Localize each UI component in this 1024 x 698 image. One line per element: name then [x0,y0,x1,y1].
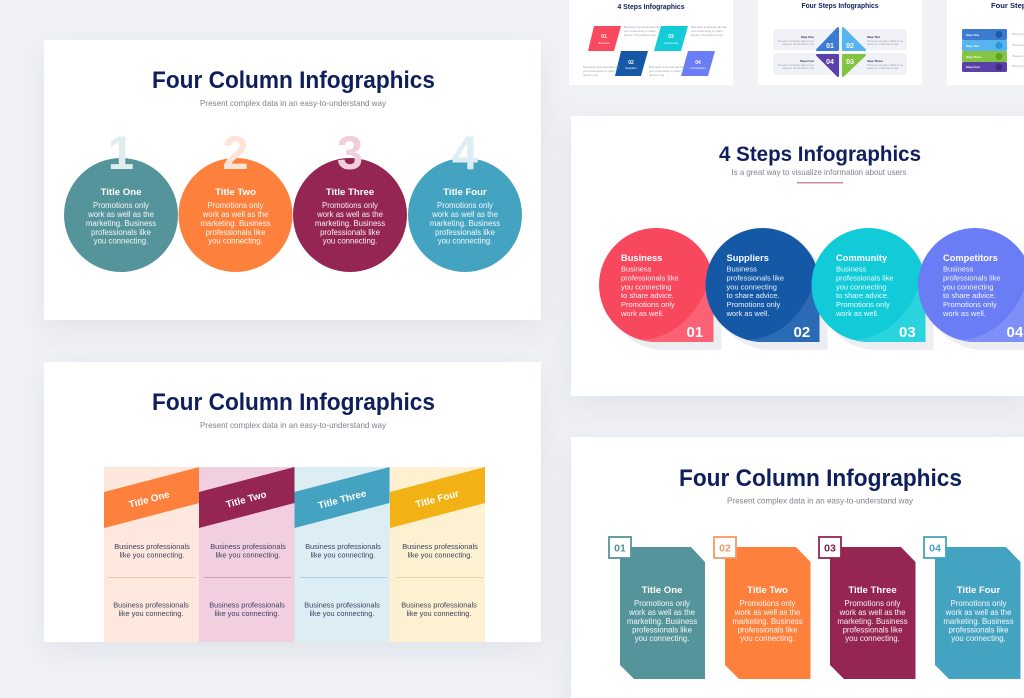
teardrop 01: professionals like [621,274,679,282]
column four: Business professionals [402,542,478,551]
card three: work as well as the [839,608,905,617]
step captions: Present complex data in an [778,63,814,67]
circle two: Promotions only [208,201,264,210]
step 01 parallelogram: 01 [601,34,607,40]
circle one [64,126,178,272]
card three: 03 [824,542,836,554]
circle two: work as well as the [202,210,268,219]
circle four: Title Four [443,187,487,198]
thumbnail captions: Business professionals like [691,25,727,29]
column four [390,467,485,642]
column one: like you connecting. [119,609,183,618]
teardrop 04: you connecting [943,282,993,292]
card one: work as well as the [628,608,695,617]
circle three: marketing. Business [315,219,385,228]
panel: four column numbered cards [571,437,1024,698]
card one: professionals like [632,626,692,634]
teardrop 04: Competitors [943,253,998,263]
circle two [178,126,292,272]
teardrop 01: to share advice. [621,291,674,300]
thumbnail captions: advice only [583,73,599,77]
card one: Promotions only [634,599,690,608]
teardrop 03: Community [836,253,888,263]
card four: Title Four [957,585,1001,596]
column three: Business professionals [305,542,381,551]
step captions: easy to understand way [867,42,899,46]
circle four: marketing. Business [430,219,500,228]
card three: you connecting. [845,634,900,643]
column three: Business professionals [304,600,380,610]
panel: 4 steps teardrops [571,116,1024,396]
teardrop 02: work as well. [726,309,769,318]
teardrop 01: Business [621,264,652,274]
step captions: Present complex data in an [867,63,904,67]
card two: work as well as the [734,608,800,617]
triangle 03 [843,55,865,76]
circle three: professionals like [320,228,380,237]
thumbnail captions: Business professionals like [649,65,685,69]
panel: four steps thumbnail [758,0,922,85]
thumbnail captions [583,25,727,77]
teardrop 04: professionals like [943,274,1001,282]
circle four [408,126,522,272]
card one: 01 [614,542,626,554]
step captions: easy to understand way [782,42,814,46]
column four: like you connecting. [408,550,472,560]
teardrop 02: Business [726,264,757,274]
teardrop 01: you connecting [621,282,671,292]
teardrop 02: 02 [794,324,810,341]
list row four: Step Four [966,65,981,69]
accent rule [797,182,843,184]
card one: Title One [642,585,682,596]
teardrop 04: to share advice. [943,291,996,300]
list row three: Step Three [966,55,982,59]
circle one: professionals like [91,228,151,237]
thumbnail captions: advice only [649,73,665,77]
teardrop 02: professionals like [726,274,784,282]
circle three: 3 [337,126,363,179]
column two [199,467,294,642]
teardrop 02: Suppliers [726,253,769,263]
step captions: Present complex data in an [867,39,904,43]
column two: like you connecting. [215,609,279,618]
thumbnail title: Four Steps Infographics: Four Steps Infographics [802,1,878,10]
card four: 04 [929,542,941,554]
step 01 parallelogram: Business [598,41,610,45]
teardrop 04: 04 [1006,324,1024,341]
circle three: Title Three [326,187,374,198]
card two: marketing. Business [732,617,803,626]
circle two: 2 [222,126,249,179]
thumbnail captions: advice. Promotions only [691,33,723,37]
teardrop 04: Promotions only [943,300,997,309]
teardrop 04: Business [943,264,974,274]
step captions: easy to understand way [867,66,899,70]
card two [714,537,810,679]
circle four: work as well as the [431,210,498,219]
column two: Business professionals [209,600,285,610]
circle two: marketing. Business [200,219,271,228]
step 03 parallelogram: Community [664,41,679,45]
step 04 parallelogram [681,51,715,76]
thumbnail captions: Business professionals like [624,25,660,29]
column one: Business professionals [113,600,189,610]
teardrop 02: to share advice. [726,291,779,300]
column three: like you connecting. [310,609,374,618]
teardrop 03: Business [836,264,867,274]
step captions: easy to understand way [782,66,814,70]
heading: 4 Steps Infographics [719,142,921,166]
panel: four column banners [44,362,541,642]
step labels [800,35,883,63]
step 04 parallelogram: 04 [695,60,701,66]
column three: like you connecting. [311,550,375,560]
teardrop 01: Promotions only [621,300,675,309]
card four: you connecting. [951,634,1006,643]
card three [819,537,916,679]
heading: Four Column Infographics [679,465,962,492]
subheading: Present complex data in an easy-to-understand way [200,421,387,430]
panel: 4 steps thumbnail [569,0,733,85]
triangle 01: 01 [826,43,834,50]
card four: work as well as the [945,608,1011,617]
circle two: professionals like [206,228,265,237]
thumbnail captions: you connecting to share [691,29,723,33]
circle four: you connecting. [438,236,492,246]
thumbnail captions: you connecting to share [649,69,681,73]
teardrop 04: work as well. [942,309,986,318]
circle two: you connecting. [208,236,263,246]
column two: Title Two [225,489,268,511]
column four: Business professionals [401,600,477,610]
circle two: Title Two [215,187,256,198]
teardrop 04 [918,228,1024,350]
thumbnail title: 4 Steps Infographics: 4 Steps Infographics [618,2,684,11]
card two: professionals like [738,626,797,634]
teardrop 02: you connecting [726,282,777,292]
list row two: Step Two [966,44,979,48]
step 02 parallelogram: 02 [628,60,634,66]
teardrop 01: Business [621,253,662,263]
column four: like you connecting. [407,609,471,618]
heading: Four Column Infographics [152,67,435,94]
teardrop 03 [812,228,934,350]
card four: professionals like [949,626,1008,634]
thumbnail captions: Business professionals like [583,65,619,69]
panel: four steps list thumbnail [947,0,1024,85]
circle one: Promotions only [93,201,149,210]
card four: Promotions only [951,599,1007,608]
subheading: Present complex data in an easy-to-understand way [727,496,914,506]
card one: marketing. Business [627,617,697,626]
teardrop 03: 03 [899,324,916,341]
triangle 01 [817,28,838,50]
card four: marketing. Business [943,617,1014,626]
list row one: Step One [966,33,980,37]
teardrop 03: to share advice. [836,291,889,300]
step 03 parallelogram [654,26,688,51]
step captions [778,39,904,70]
teardrop 02: Promotions only [726,300,781,309]
column one: like you connecting. [120,550,184,560]
card one: you connecting. [635,634,689,643]
teardrop 02 [706,228,828,350]
step captions: Present complex data in an [778,39,814,43]
thumbnail row panels [773,29,907,75]
circle four: Promotions only [437,201,493,210]
step labels: Step Four [800,59,815,63]
circle three [293,126,407,272]
circle one: you connecting. [94,236,148,246]
step 02 parallelogram: Suppliers [625,66,637,70]
card two: 02 [719,542,731,554]
thumbnail captions: you connecting to share [624,29,656,33]
teardrop 01: 01 [686,324,703,341]
step 02 parallelogram [615,51,648,76]
subheading: Is a great way to visualize information about users [732,168,906,177]
card two: Promotions only [740,599,796,608]
triangle 03: 03 [846,59,854,66]
teardrop 01 [599,228,722,350]
column one: Business professionals [114,542,190,551]
teardrop 03: you connecting [836,282,886,292]
subheading: Present complex data in an easy-to-understand way [200,99,387,108]
card three: professionals like [843,626,902,634]
card three: marketing. Business [837,617,908,626]
teardrop 03: Promotions only [836,300,890,309]
column one: Title One [128,489,171,511]
triangle 02: 02 [846,43,854,50]
thumbnail captions: you connecting to share [583,69,615,73]
teardrop 03: professionals like [836,274,894,282]
circle three: you connecting. [323,236,377,246]
list captions [1012,32,1024,68]
step labels: Step One [801,35,814,39]
step 01 parallelogram [588,26,621,51]
card three: Promotions only [845,599,901,608]
circle one: Title One [101,187,141,198]
circle three: Promotions only [322,201,378,210]
card one [609,537,705,679]
triangle 04: 04 [826,59,834,66]
circle one: 1 [108,126,134,179]
step 03 parallelogram: 03 [668,34,674,40]
card three: Title Three [848,585,897,596]
column three: Title Three [317,488,368,512]
column two: like you connecting. [216,550,280,560]
circle one: work as well as the [87,210,154,219]
circle four: 4 [452,126,478,179]
teardrop 03: work as well. [835,309,879,318]
circle four: professionals like [435,228,495,237]
column four: Title Four [414,488,460,511]
card four [924,537,1020,679]
step 04 parallelogram: Competitors [690,66,706,70]
heading: Four Column Infographics [152,389,435,416]
card two: you connecting. [740,634,795,643]
circle one: marketing. Business [86,219,156,228]
teardrop 01: work as well. [620,309,664,318]
triangle 04 [817,55,838,76]
circle three: work as well as the [316,210,383,219]
triangle 02 [843,28,865,50]
thumbnail captions: advice. Promotions only [624,33,656,37]
column three [294,467,390,642]
card two: Title Two [747,585,788,596]
panel: four column circles [44,40,541,320]
column one [104,467,200,642]
step labels: Step Two [867,35,880,39]
column two: Business professionals [210,542,286,551]
step labels: Step Three [867,59,883,63]
